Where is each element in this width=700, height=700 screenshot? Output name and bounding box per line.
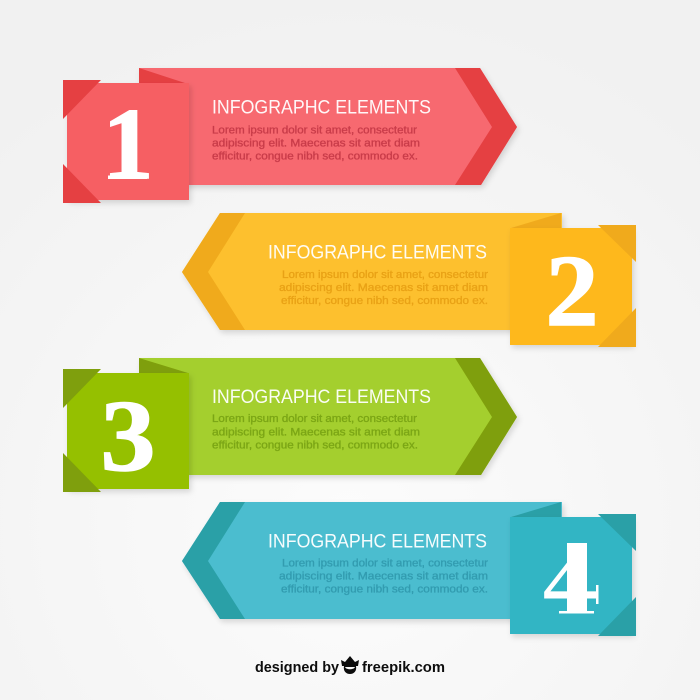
icon: freepik logo — [341, 656, 359, 674]
body text: adipiscing elit. Maecenas sit amet diam — [212, 426, 420, 438]
ribbon fold — [139, 358, 188, 373]
heading: INFOGRAPHC ELEMENTS — [268, 530, 487, 552]
body text — [212, 413, 420, 452]
body text: efficitur, congue nibh sed, commodo ex. — [212, 440, 418, 452]
ribbon fold — [511, 502, 561, 517]
arrow chevron — [455, 358, 517, 475]
corner fold bottom — [598, 308, 636, 347]
body text: adipiscing elit. Maecenas sit amet diam — [279, 282, 488, 294]
body text: Lorem ipsum dolor sit amet, consectetur — [282, 558, 488, 570]
panel: step 3 green — [63, 358, 517, 493]
body text — [212, 124, 420, 162]
ribbon fold — [511, 213, 561, 228]
body text: efficitur, congue nibh sed, commodo ex. — [212, 150, 418, 162]
corner fold top — [598, 225, 636, 262]
heading: INFOGRAPHC ELEMENTS — [212, 96, 431, 118]
body text — [279, 269, 488, 307]
body text — [279, 558, 488, 596]
body text: Lorem ipsum dolor sit amet, consectetur — [282, 269, 488, 281]
ribbon arrow — [139, 358, 517, 475]
body text: Lorem ipsum dolor sit amet, consectetur — [212, 124, 417, 136]
corner fold bottom — [63, 164, 101, 203]
ribbon arrow — [182, 213, 562, 330]
ribbon arrow — [182, 502, 562, 619]
panel: step 1 red — [63, 68, 517, 203]
number square — [67, 83, 189, 200]
corner fold top — [63, 369, 101, 408]
ribbon fold — [139, 68, 188, 84]
arrow chevron — [182, 502, 245, 619]
arrow chevron — [182, 213, 245, 330]
body text: adipiscing elit. Maecenas sit amet diam — [279, 570, 488, 582]
panel: step 4 blue — [182, 502, 636, 636]
number 2: 2 — [546, 235, 598, 348]
panel: step 2 yellow — [182, 213, 636, 348]
corner fold bottom — [63, 453, 101, 492]
number 3: 3 — [100, 380, 156, 493]
number square — [510, 228, 632, 345]
body text: Lorem ipsum dolor sit amet, consectetur — [212, 413, 417, 425]
body text: adipiscing elit. Maecenas sit amet diam — [212, 138, 420, 150]
number 1: 1 — [102, 88, 154, 201]
arrow chevron — [455, 68, 517, 185]
number 4: 4 — [542, 523, 598, 636]
number square — [67, 373, 189, 489]
corner fold top — [63, 80, 101, 119]
ribbon arrow — [139, 68, 517, 185]
credit text right: freepik.com — [362, 660, 445, 676]
heading: INFOGRAPHC ELEMENTS — [212, 386, 431, 408]
credit text left: designed by — [255, 660, 339, 676]
corner fold bottom — [598, 597, 636, 636]
body text: efficitur, congue nibh sed, commodo ex. — [281, 584, 488, 596]
infographic panels — [63, 68, 636, 676]
number square — [510, 517, 632, 634]
body text: efficitur, congue nibh sed, commodo ex. — [281, 295, 488, 307]
corner fold top — [598, 514, 636, 551]
footer credit — [255, 656, 445, 676]
heading: INFOGRAPHC ELEMENTS — [268, 242, 487, 264]
